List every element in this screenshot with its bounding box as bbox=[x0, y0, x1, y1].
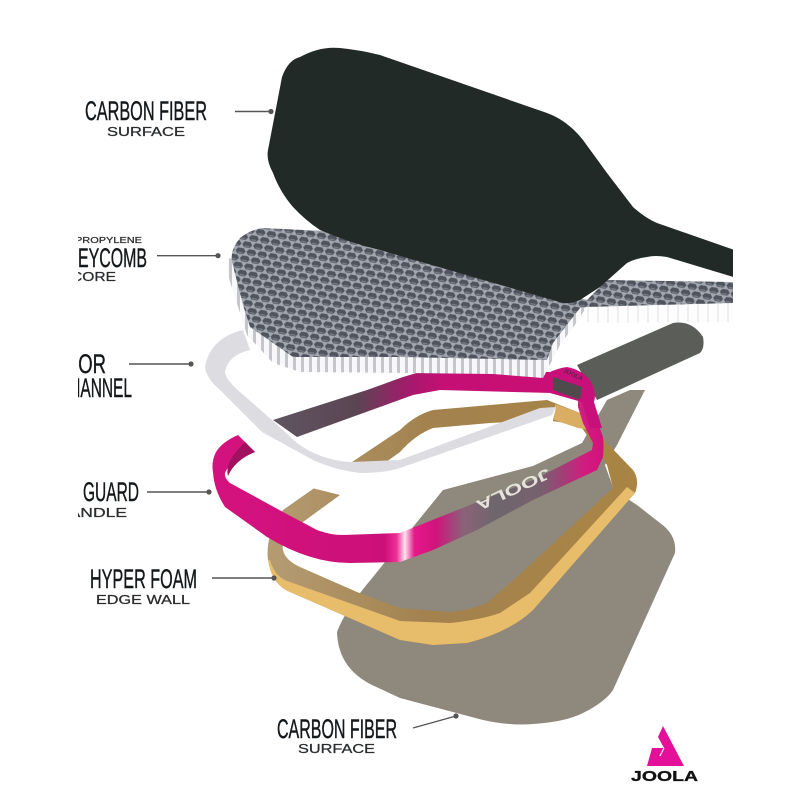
label: back carbon fiber surface: SURFACE bbox=[298, 742, 375, 756]
leader line: hyper foam edge wall bbox=[212, 575, 277, 581]
honeycomb core bbox=[227, 228, 733, 378]
label: carbon fiber surface bbox=[85, 96, 207, 139]
label: carbon fiber surface: CARBON FIBER bbox=[85, 96, 207, 126]
label: carbon fiber surface: SURFACE bbox=[107, 125, 185, 139]
label: foam channel: FOR bbox=[67, 349, 106, 379]
label: back carbon fiber surface bbox=[277, 714, 397, 756]
logo: JOOLA bbox=[631, 726, 699, 785]
label: back carbon fiber surface: CARBON FIBER bbox=[277, 714, 397, 744]
label: hyper foam edge wall: EDGE WALL bbox=[96, 593, 190, 607]
label: honeycomb core: CORE bbox=[71, 270, 116, 284]
label: honeycomb core bbox=[78, 236, 146, 282]
leader line: back carbon fiber surface bbox=[413, 713, 459, 728]
white foam channel bbox=[205, 330, 556, 495]
label: guard handle: GUARD bbox=[83, 477, 139, 507]
leader line: foam channel bbox=[129, 361, 194, 367]
exploded paddle infographic bbox=[78, 48, 733, 782]
wordmark on frame: JOOLA bbox=[473, 464, 553, 514]
honeycomb side walls bbox=[227, 258, 590, 378]
leader line: honeycomb core bbox=[157, 253, 221, 258]
handle throat joint: JOOLA bbox=[562, 368, 584, 383]
label: guard handle: HANDLE bbox=[56, 506, 127, 520]
pink frame front band bbox=[212, 390, 603, 563]
back carbon fiber surface bbox=[337, 390, 675, 724]
label: guard handle bbox=[78, 482, 138, 518]
top carbon fiber surface bbox=[268, 48, 740, 303]
label: hyper foam edge wall bbox=[90, 564, 197, 607]
label: honeycomb core: EYCOMB bbox=[78, 243, 147, 273]
handle grip bbox=[577, 323, 704, 400]
hyper foam edge wall bbox=[268, 400, 637, 645]
label: hyper foam edge wall: HYPER FOAM bbox=[90, 564, 197, 594]
label: foam channel bbox=[78, 354, 132, 398]
handle throat joint bbox=[548, 367, 602, 428]
logo: JOOLA: JOOLA bbox=[631, 769, 699, 785]
honeycomb top face bbox=[232, 228, 733, 360]
label: honeycomb core: PROPYLENE bbox=[75, 235, 142, 245]
label: foam channel: CHANNEL bbox=[58, 373, 132, 403]
leader line: guard handle bbox=[147, 489, 212, 495]
pink frame back band bbox=[273, 372, 552, 437]
leader line: carbon fiber surface bbox=[235, 109, 274, 114]
